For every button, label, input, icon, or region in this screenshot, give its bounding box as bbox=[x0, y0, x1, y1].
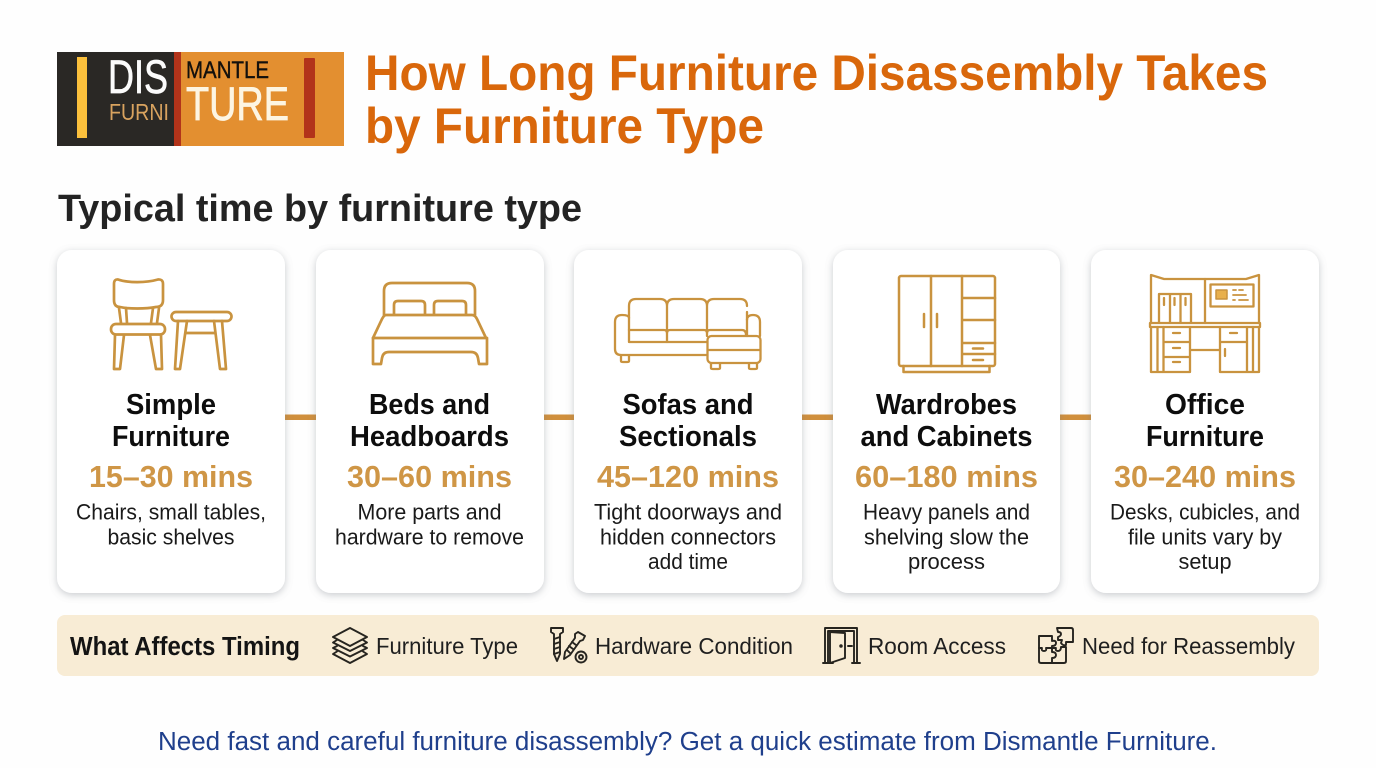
panel: simple furniture bbox=[57, 250, 285, 593]
panel: office furniture bbox=[1091, 250, 1319, 593]
description: Heavy panels and bbox=[863, 500, 1030, 524]
description: Tight doorways and bbox=[594, 500, 782, 524]
description: basic shelves bbox=[108, 524, 234, 550]
time range: 30–60 mins bbox=[347, 460, 512, 494]
panel: what affects timing bbox=[57, 615, 1319, 676]
connector: cards 1 to 2 bbox=[285, 414, 316, 420]
description: setup bbox=[1178, 549, 1232, 574]
label: room access: Room Access bbox=[868, 633, 1006, 659]
card title: Sectionals bbox=[619, 421, 757, 453]
description: file units vary by bbox=[1128, 524, 1282, 550]
logo: Dismantle Furniture bbox=[57, 50, 344, 146]
icon: bed bbox=[373, 283, 487, 364]
icon: layers bbox=[333, 628, 367, 663]
icon: puzzle pieces bbox=[1039, 628, 1073, 663]
bar heading: What Affects Timing bbox=[70, 633, 300, 661]
panel: beds and headboards bbox=[316, 250, 544, 593]
description: shelving slow the bbox=[864, 524, 1029, 550]
description bbox=[335, 500, 524, 550]
logo: Dismantle Furniture: MANTLE bbox=[186, 57, 269, 84]
description: hidden connectors bbox=[600, 524, 776, 550]
icon: open door bbox=[823, 628, 860, 663]
card title: Beds and bbox=[369, 389, 490, 421]
time range: 15–30 mins bbox=[89, 460, 253, 494]
title bbox=[365, 45, 1268, 154]
logo: Dismantle Furniture: TURE bbox=[186, 77, 289, 130]
section heading: Typical time by furniture type bbox=[58, 188, 582, 230]
description: process bbox=[908, 549, 985, 574]
time range: 60–180 mins bbox=[855, 460, 1038, 494]
description bbox=[1110, 500, 1300, 574]
card title: Furniture bbox=[112, 421, 230, 453]
card title: and Cabinets bbox=[860, 421, 1032, 453]
time range: 45–120 mins bbox=[597, 460, 779, 494]
card title: Headboards bbox=[350, 421, 509, 453]
description: add time bbox=[648, 549, 728, 574]
card title bbox=[1146, 389, 1264, 453]
call to action: Need fast and careful furniture disassembly? Get a quick estimate from Dismantle Furniture. bbox=[158, 728, 1217, 756]
icon: office desk bbox=[1150, 275, 1260, 372]
icon: screws and washer bbox=[551, 628, 586, 662]
description bbox=[594, 500, 782, 574]
description: Chairs, small tables, bbox=[76, 500, 266, 524]
icon: sectional sofa bbox=[615, 299, 760, 369]
card title bbox=[619, 389, 757, 453]
label: need for reassembly: Need for Reassembly bbox=[1082, 633, 1295, 659]
panel: wardrobes and cabinets bbox=[833, 250, 1060, 593]
title: How Long Furniture Disassembly Takes bbox=[365, 45, 1268, 101]
logo: Dismantle Furniture: DIS bbox=[108, 50, 168, 103]
connector: cards 2 to 3 bbox=[544, 414, 574, 420]
card title: Simple bbox=[126, 389, 216, 421]
description: hardware to remove bbox=[335, 524, 524, 550]
description bbox=[76, 500, 266, 550]
card title: Wardrobes bbox=[876, 389, 1017, 421]
card title: Furniture bbox=[1146, 421, 1264, 453]
card title bbox=[112, 389, 230, 453]
card title bbox=[350, 389, 509, 453]
time range: 30–240 mins bbox=[1114, 460, 1296, 494]
connector: cards 3 to 4 bbox=[802, 414, 833, 420]
label: hardware condition: Hardware Condition bbox=[595, 633, 793, 659]
description: More parts and bbox=[358, 500, 502, 524]
label: furniture type: Furniture Type bbox=[376, 633, 518, 659]
description: Desks, cubicles, and bbox=[1110, 500, 1300, 524]
icon: wardrobe bbox=[899, 276, 995, 372]
connector: cards 4 to 5 bbox=[1060, 414, 1091, 420]
description bbox=[863, 500, 1030, 574]
card title bbox=[860, 389, 1032, 453]
icon: chair and table bbox=[111, 279, 232, 369]
card title: Office bbox=[1165, 389, 1245, 421]
title: by Furniture Type bbox=[365, 98, 764, 154]
card title: Sofas and bbox=[622, 389, 754, 421]
logo: Dismantle Furniture: FURNI bbox=[109, 99, 169, 125]
panel: sofas and sectionals bbox=[574, 250, 802, 593]
